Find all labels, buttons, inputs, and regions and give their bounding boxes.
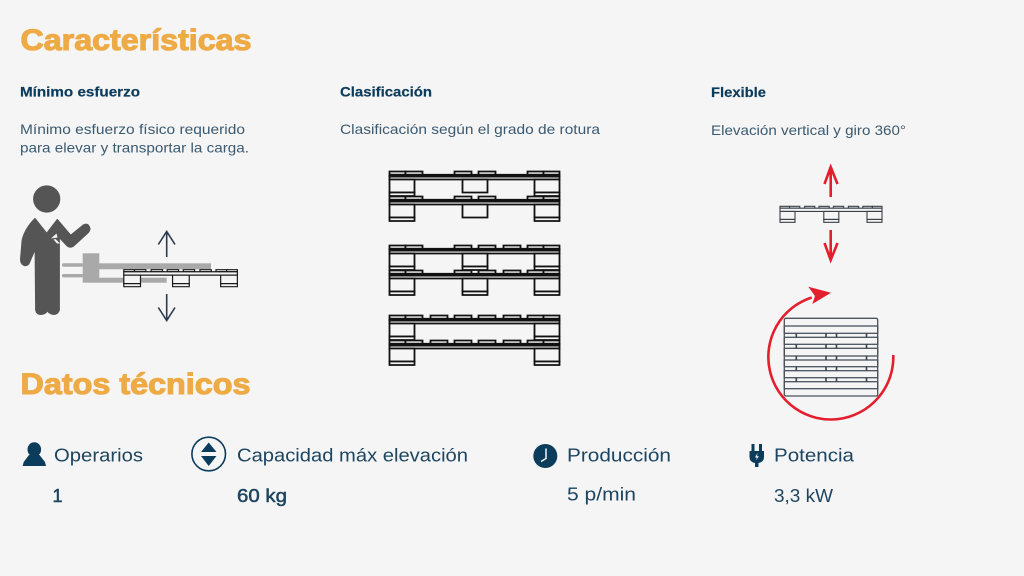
value: 60 kg bbox=[237, 486, 287, 506]
label: Capacidad máx elevación bbox=[237, 446, 468, 466]
pallet type 3 bbox=[390, 316, 560, 365]
value: 1 bbox=[52, 486, 63, 506]
heading: Características: Características bbox=[20, 24, 252, 57]
value: 3,3 kW bbox=[774, 486, 833, 506]
icon: plug bbox=[750, 444, 764, 467]
arrow: red down bbox=[824, 230, 838, 260]
label: Producción bbox=[567, 446, 671, 466]
panel: Mínimo esfuerzo bbox=[20, 84, 249, 320]
arrow: down bbox=[158, 294, 175, 320]
icon: pallet side view bbox=[124, 270, 237, 287]
subheading: Flexible bbox=[711, 84, 766, 100]
panel: Clasificación bbox=[340, 84, 600, 365]
icon: person bbox=[23, 442, 46, 466]
pallet type 1 bbox=[390, 172, 560, 221]
icon: small pallet bbox=[780, 206, 882, 222]
panel: Flexible bbox=[711, 84, 906, 419]
description line 2: para elevar y transportar la carga. bbox=[20, 140, 249, 156]
icon: pallet jack bbox=[62, 253, 211, 283]
heading: Datos técnicos: Datos técnicos bbox=[20, 368, 250, 401]
description: Elevación vertical y giro 360° bbox=[711, 122, 906, 138]
arrow: rotation bbox=[768, 287, 893, 419]
description: Clasificación según el grado de rotura bbox=[340, 121, 600, 137]
spec: Operarios bbox=[23, 442, 143, 506]
subheading: Clasificación bbox=[340, 84, 432, 100]
icon: clock bbox=[533, 444, 557, 468]
spec: Potencia bbox=[750, 444, 855, 506]
label: Operarios bbox=[54, 446, 143, 466]
arrow: red up bbox=[824, 167, 838, 197]
arrow: up bbox=[158, 232, 175, 257]
spec: Capacidad máx elevación bbox=[192, 437, 468, 506]
icon: operator bbox=[20, 186, 90, 315]
label: Potencia bbox=[774, 446, 855, 466]
value: 5 p/min bbox=[567, 484, 636, 504]
pallet type 2 bbox=[390, 246, 560, 295]
icon: up down circle bbox=[192, 437, 226, 471]
description: Mínimo esfuerzo físico requerido bbox=[20, 121, 245, 137]
icon: pallet top view bbox=[784, 318, 878, 396]
spec: Producción bbox=[533, 444, 671, 504]
subheading: Mínimo esfuerzo bbox=[20, 84, 140, 100]
